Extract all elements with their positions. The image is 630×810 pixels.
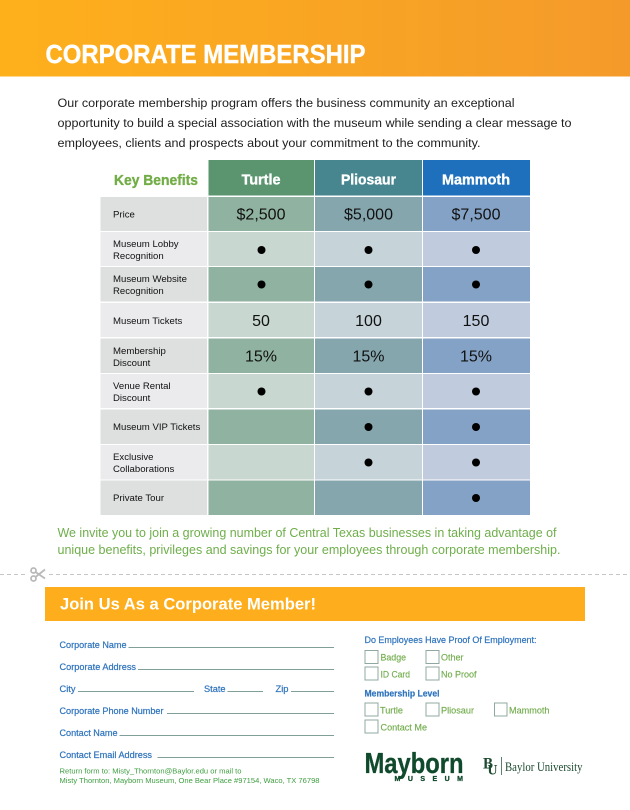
row: membership discount: 15%	[460, 348, 492, 366]
return instructions	[60, 766, 320, 785]
row: venue rental discount: Discount	[113, 393, 151, 404]
membership level options: Contact Me	[380, 722, 427, 732]
contact form fields	[60, 640, 334, 760]
row: museum tickets: 50	[252, 313, 270, 330]
contact form fields: State	[204, 684, 226, 694]
logo: Baylor University: U	[488, 762, 498, 778]
table header row: Pliosaur	[341, 172, 396, 188]
row: membership discount: Discount	[113, 358, 151, 369]
contact form fields: Zip	[276, 684, 289, 694]
row: membership discount: 15%	[352, 348, 385, 366]
title: CORPORATE MEMBERSHIP	[46, 41, 366, 69]
return instructions: Misty Thornton, Mayborn Museum, One Bear Place #97154, Waco, TX 76798	[60, 776, 320, 785]
intro paragraph	[58, 96, 572, 150]
proof of employment options: Other	[441, 652, 464, 662]
row: membership discount: 15%	[245, 348, 277, 366]
table header row: Turtle	[242, 172, 280, 188]
row: museum website recognition	[100, 267, 530, 302]
row: museum lobby recognition	[100, 232, 530, 266]
membership benefits table	[100, 160, 530, 515]
row: private tour	[100, 480, 530, 515]
row: price: $2,500	[237, 206, 286, 224]
row: exclusive collaborations: Exclusive	[113, 452, 154, 463]
row: price	[100, 197, 530, 231]
proof of employment options: No Proof	[441, 670, 477, 680]
invitation text	[58, 526, 560, 557]
row: price: Price	[113, 210, 135, 220]
contact form fields: City	[60, 684, 76, 694]
row: museum tickets: Museum Tickets	[113, 316, 183, 327]
form heading band: Join Us As a Corporate Member!	[60, 596, 316, 614]
membership level options: Pliosaur	[441, 706, 474, 716]
table header row	[114, 160, 530, 196]
membership level options: Mammoth	[509, 706, 550, 716]
proof of employment options	[364, 635, 536, 680]
row: price: $7,500	[452, 206, 501, 224]
intro paragraph: employees, clients and prospects about your commitment to the community.	[58, 136, 480, 150]
row: venue rental discount: Venue Rental	[113, 381, 171, 392]
proof of employment options: Badge	[380, 652, 406, 662]
contact form fields: Contact Email Address	[60, 750, 153, 760]
row: membership discount	[100, 338, 530, 373]
row: museum lobby recognition: Museum Lobby	[113, 239, 179, 250]
header banner	[0, 0, 630, 76]
row: museum VIP tickets: Museum VIP Tickets	[113, 422, 200, 433]
icon: scissors	[31, 568, 45, 581]
row: membership discount: Membership	[113, 346, 166, 357]
table header row: Key Benefits	[114, 172, 198, 189]
invitation text: We invite you to join a growing number of Central Texas businesses in taking advantage of	[58, 526, 557, 540]
row: museum tickets: 100	[355, 313, 382, 330]
row: private tour: Private Tour	[113, 493, 165, 504]
logo: Baylor University: Baylor University	[505, 760, 583, 774]
row: museum lobby recognition: Recognition	[113, 251, 164, 262]
membership level options: Turtle	[380, 706, 403, 716]
logo: Baylor University: B	[483, 756, 493, 772]
contact form fields: Corporate Name	[60, 640, 127, 650]
intro paragraph: opportunity to build a special association with the museum while sending a clear message to	[58, 116, 572, 130]
logo: Mayborn Museum: Mayborn	[364, 748, 464, 780]
contact form fields: Contact Name	[60, 728, 118, 738]
cut line with scissors	[0, 568, 630, 581]
row: price: $5,000	[344, 206, 393, 224]
row: exclusive collaborations	[100, 445, 530, 480]
proof of employment options: ID Card	[380, 670, 410, 680]
return instructions: Return form to: Misty_Thornton@Baylor.edu or mail to	[60, 766, 242, 776]
row: museum tickets	[100, 303, 530, 337]
table header row: Mammoth	[442, 172, 510, 188]
form heading band	[45, 587, 585, 621]
invitation text: unique benefits, privileges and savings for your employees through corporate membership.	[58, 543, 560, 557]
row: venue rental discount	[100, 374, 530, 408]
logo: Mayborn Museum: MUSEUM	[394, 776, 463, 783]
row: museum VIP tickets	[100, 410, 530, 444]
row: museum tickets: 150	[463, 313, 489, 330]
row: museum website recognition: Recognition	[113, 286, 164, 297]
row: exclusive collaborations: Collaborations	[113, 464, 175, 475]
membership level options	[364, 688, 550, 733]
logo: Baylor University	[483, 756, 583, 778]
contact form fields: Corporate Address	[60, 662, 137, 672]
row: museum website recognition: Museum Website	[113, 274, 187, 285]
membership level options: Membership Level	[364, 688, 440, 698]
proof of employment options: Do Employees Have Proof Of Employment:	[364, 635, 536, 645]
contact form fields: Corporate Phone Number	[60, 706, 164, 716]
intro paragraph: Our corporate membership program offers the business community an exceptional	[58, 96, 514, 110]
